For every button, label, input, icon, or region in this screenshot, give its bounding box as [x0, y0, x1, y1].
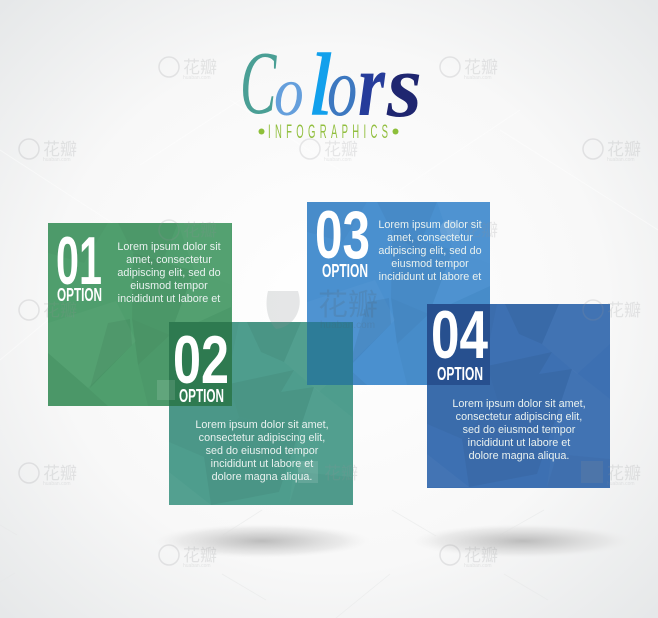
label option 04: OPTION	[437, 364, 483, 384]
watermarks: 花瓣	[43, 140, 77, 159]
text 01: incididunt ut labore et	[118, 293, 220, 305]
overlap 03 and 04	[427, 304, 490, 385]
watermarks: 花瓣	[43, 301, 77, 320]
title word: Colors: s	[386, 37, 422, 136]
text 03: incididunt ut labore et	[379, 271, 481, 283]
watermarks: 花瓣	[43, 464, 77, 483]
watermarks: 花瓣	[607, 140, 641, 159]
watermarks: 花瓣	[324, 140, 358, 159]
title word: Colors: r	[358, 35, 386, 135]
watermarks: 花瓣	[607, 464, 641, 483]
text 02	[195, 419, 329, 483]
watermarks: 花瓣	[183, 546, 217, 565]
number 04: 04	[431, 297, 488, 373]
watermarks: huaban.com	[43, 157, 71, 163]
panel 02	[169, 322, 353, 505]
content 02	[173, 322, 329, 483]
text 02: consectetur adipiscing elit,	[199, 432, 325, 444]
watermarks: 花瓣	[183, 221, 217, 240]
title word: Colors: o	[274, 54, 304, 131]
content 03	[315, 197, 482, 283]
title word: Colors: l	[308, 37, 332, 134]
text 04: incididunt ut labore et	[468, 437, 570, 449]
text 01: eiusmod tempor	[130, 280, 208, 292]
text 04: sed do eiusmod tempor	[463, 424, 576, 436]
watermarks: huaban.com	[464, 75, 492, 81]
watermarks: 花瓣	[464, 58, 498, 77]
number 02: 02	[173, 322, 229, 398]
text 02: sed do eiusmod tempor	[206, 445, 319, 457]
text 02: dolore magna aliqua.	[212, 471, 312, 483]
text 01: adipiscing elit, sed do	[117, 267, 221, 279]
text 04	[452, 398, 586, 462]
overlap 01 and 02	[169, 322, 232, 406]
watermarks: 花瓣	[464, 546, 498, 565]
text 03: eiusmod tempor	[391, 258, 469, 270]
label option 02: OPTION	[179, 386, 224, 406]
watermarks: huaban.com	[320, 320, 375, 331]
panel 04	[427, 304, 610, 488]
floor shadow right	[411, 524, 635, 558]
label option 01: OPTION	[57, 285, 102, 305]
text 03: Lorem ipsum dolor sit	[378, 219, 482, 231]
panel 03	[307, 202, 490, 385]
text 02: incididunt ut labore et	[211, 458, 313, 470]
text 01	[117, 241, 221, 305]
floor shadow left	[154, 524, 370, 558]
watermarks: 花瓣	[464, 221, 498, 240]
watermarks: huaban.com	[183, 75, 211, 81]
text 04: consectetur adipiscing elit,	[456, 411, 582, 423]
watermarks: 花瓣	[324, 464, 358, 483]
watermarks: huaban.com	[464, 563, 492, 569]
content 01	[56, 223, 221, 305]
label option 03: OPTION	[322, 261, 368, 281]
watermarks: huaban.com	[607, 481, 635, 487]
title word: Colors	[240, 34, 422, 136]
text 03	[378, 219, 482, 283]
text 03: amet, consectetur	[387, 232, 473, 244]
text 01: amet, consectetur	[126, 254, 212, 266]
text 04: Lorem ipsum dolor sit amet,	[452, 398, 586, 410]
watermarks	[19, 57, 641, 569]
panel 01	[48, 223, 232, 406]
watermarks: huaban.com	[607, 157, 635, 163]
number 03: 03	[315, 197, 370, 273]
overlap 02 and 03	[307, 322, 353, 385]
title word: Colors: C	[240, 34, 277, 134]
title	[240, 34, 422, 143]
watermarks: 花瓣	[318, 289, 378, 322]
title word: Colors: o	[327, 40, 357, 133]
watermarks: 花瓣	[183, 58, 217, 77]
text 02: Lorem ipsum dolor sit amet,	[195, 419, 329, 431]
text 04: dolore magna aliqua.	[469, 450, 569, 462]
watermarks: huaban.com	[183, 563, 211, 569]
number 01: 01	[56, 223, 102, 299]
watermarks: huaban.com	[43, 481, 71, 487]
title subtitle: infographics: INFOGRAPHICS	[268, 122, 388, 143]
text 01: Lorem ipsum dolor sit	[117, 241, 221, 253]
content 04	[431, 297, 586, 462]
watermarks: 花瓣	[607, 301, 641, 320]
text 03: adipiscing elit, sed do	[378, 245, 482, 257]
watermarks: huaban.com	[324, 157, 352, 163]
